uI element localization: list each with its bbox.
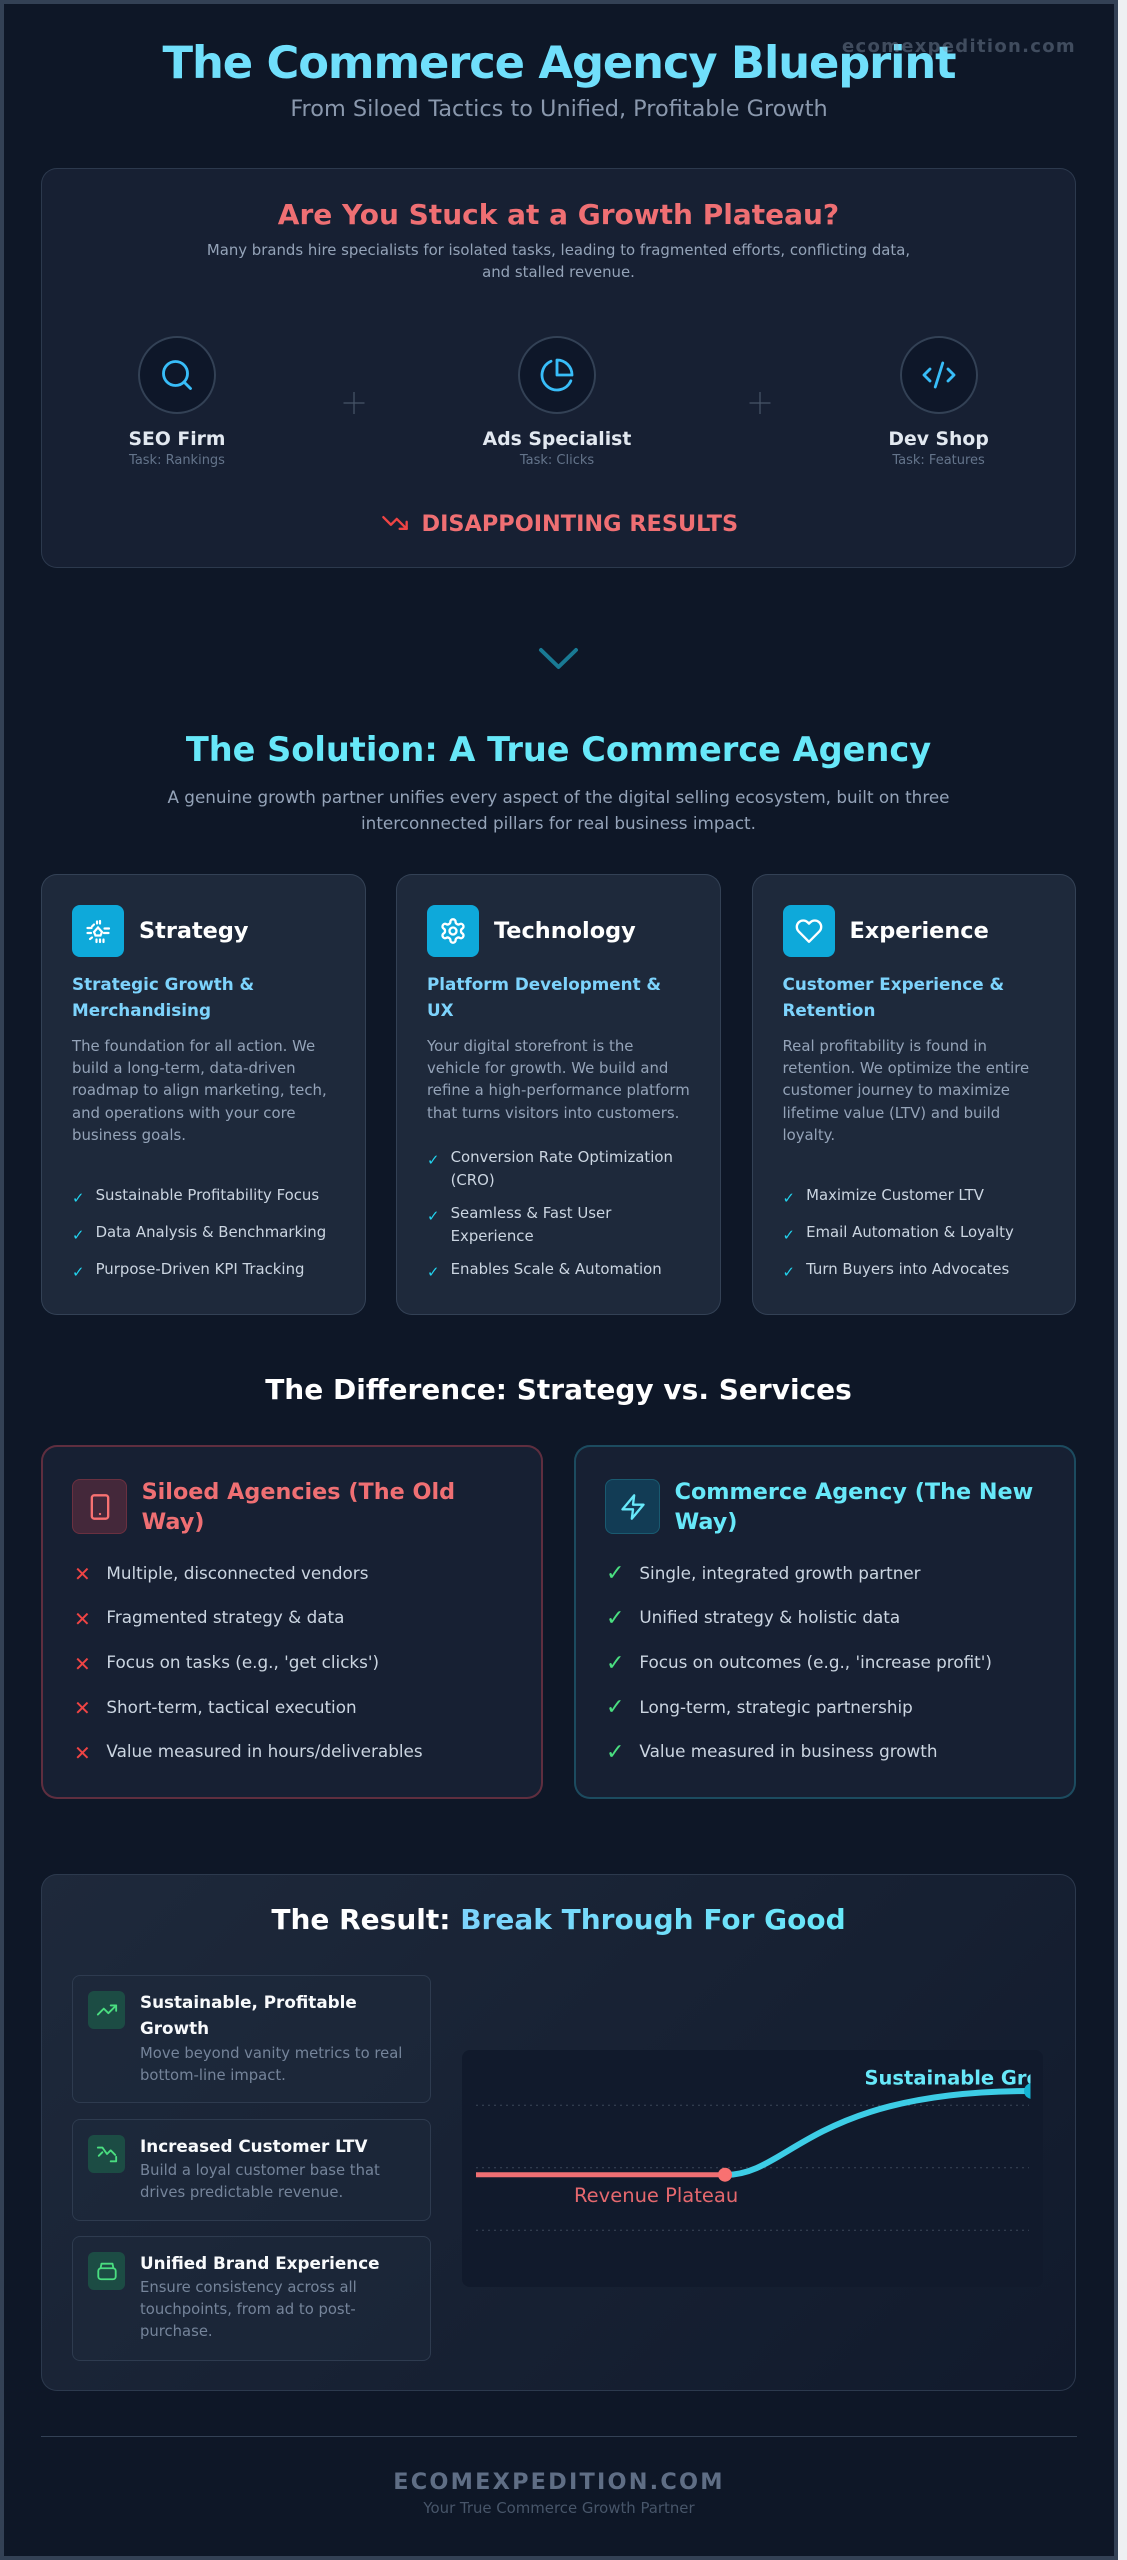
benefit title: Growth bbox=[140, 2018, 209, 2038]
panel: strategy: ✓ bbox=[72, 1263, 84, 1281]
card body bbox=[782, 1036, 1029, 1144]
label: dev shop: Dev Shop bbox=[888, 429, 989, 450]
panel: experience: Maximize Customer LTV bbox=[806, 1186, 984, 1204]
list item: ✓ bbox=[606, 1740, 624, 1765]
panel: technology: ✓ bbox=[427, 1151, 439, 1169]
card body: loyalty. bbox=[782, 1126, 835, 1144]
card body: The foundation for all action. We bbox=[72, 1036, 315, 1054]
footer bbox=[41, 2436, 1077, 2522]
card subtitle bbox=[782, 974, 1004, 1020]
list item: ✓ bbox=[606, 1650, 624, 1676]
benefit description: Move beyond vanity metrics to real bbox=[140, 2044, 402, 2062]
list item: Multiple, disconnected vendors bbox=[106, 1563, 368, 1583]
panel: strategy: ✓ bbox=[72, 1188, 84, 1206]
card body: vehicle for growth. We build and bbox=[427, 1059, 668, 1077]
icon: shuffle line bbox=[88, 2135, 125, 2173]
panel: strategy: Purpose-Driven KPI Tracking bbox=[96, 1260, 304, 1278]
list item: Focus on outcomes (e.g., 'increase profit') bbox=[639, 1652, 992, 1672]
heading: commerce: Commerce Agency (The New bbox=[675, 1479, 1033, 1505]
list item bbox=[782, 1260, 1009, 1281]
benefit title: Unified Brand Experience bbox=[140, 2253, 380, 2273]
card subtitle bbox=[72, 974, 254, 1020]
card body: Your digital storefront is the bbox=[427, 1036, 633, 1054]
icon: bolt bbox=[605, 1479, 660, 1534]
panel: experience: ✓ bbox=[782, 1188, 795, 1206]
list item: ✕ bbox=[74, 1652, 91, 1676]
list item: ✕ bbox=[74, 1562, 91, 1586]
heading: siloed bbox=[142, 1479, 455, 1535]
list item: ✓ bbox=[606, 1606, 624, 1631]
benefit title bbox=[140, 1992, 357, 2038]
panel: technology: Seamless & Fast User bbox=[451, 1204, 611, 1222]
icon: plus two bbox=[750, 392, 770, 414]
benefit title: Increased Customer LTV bbox=[140, 2136, 367, 2156]
benefit description: Build a loyal customer base that bbox=[140, 2162, 380, 2178]
list item bbox=[427, 1204, 612, 1245]
panel: experience: Email Automation & Loyalty bbox=[806, 1223, 1014, 1241]
heading: plateau: Are You Stuck at a Growth Plateau? bbox=[278, 198, 839, 230]
chart: revenue plateau to growth bbox=[462, 2050, 1030, 2231]
panel: experience bbox=[752, 874, 1076, 1315]
benefit description: purchase. bbox=[140, 2323, 213, 2340]
panel: technology: (CRO) bbox=[451, 1171, 495, 1189]
text: plateau description: Many brands hire specialists for isolated tasks, leading to fragmented efforts, conflicting data, bbox=[207, 241, 910, 259]
panel: technology: Enables Scale & Automation bbox=[451, 1260, 662, 1278]
list item bbox=[427, 1260, 662, 1281]
text: solution description bbox=[167, 786, 950, 832]
benefit description bbox=[140, 2277, 357, 2343]
panel: strategy bbox=[41, 874, 366, 1315]
card body: roadmap to align marketing, tech, bbox=[72, 1081, 327, 1099]
specialist: SEO firm bbox=[129, 336, 225, 468]
label: SEO firm: SEO Firm bbox=[129, 429, 225, 450]
heading: difference: The Difference: Strategy vs. Services bbox=[265, 1373, 852, 1406]
panel: technology: Experience bbox=[451, 1227, 534, 1245]
list item bbox=[782, 1186, 984, 1206]
benefit description: Ensure consistency across all bbox=[140, 2279, 357, 2296]
panel: strategy: Data Analysis & Benchmarking bbox=[96, 1223, 326, 1241]
heading: siloed: Way) bbox=[142, 1509, 204, 1535]
icon: smartphone bbox=[72, 1479, 127, 1534]
list item: ✕ bbox=[74, 1607, 91, 1631]
icon: search bbox=[138, 336, 216, 414]
icon: gear bbox=[427, 905, 479, 957]
card title: Experience bbox=[850, 918, 989, 944]
list item bbox=[72, 1260, 304, 1281]
label: dev task: Task: Features bbox=[892, 453, 985, 468]
card subtitle: Customer Experience & bbox=[782, 974, 1004, 994]
benefit: profitable growth bbox=[72, 1975, 431, 2103]
heading: siloed: Siloed Agencies (The Old bbox=[142, 1479, 455, 1505]
panel: technology: ✓ bbox=[427, 1207, 439, 1225]
chart: revenue plateau to growth: Revenue Plateau bbox=[574, 2184, 738, 2207]
panel: result bbox=[41, 1874, 1076, 2391]
list item: Single, integrated growth partner bbox=[639, 1563, 921, 1583]
arrow: chevron down bbox=[538, 648, 578, 670]
footer tagline: Your True Commerce Growth Partner bbox=[423, 2499, 695, 2517]
panel: siloed agencies bbox=[41, 1445, 543, 1799]
card body: lifetime value (LTV) and build bbox=[782, 1104, 1000, 1122]
text: disappointing results: DISAPPOINTING RESULTS bbox=[422, 511, 738, 537]
panel: experience: ✓ bbox=[782, 1263, 795, 1281]
card body: customer journey to maximize bbox=[782, 1081, 1010, 1099]
list item: ✕ bbox=[74, 1741, 91, 1765]
panel: technology: Conversion Rate Optimization bbox=[451, 1148, 673, 1166]
card body: business goals. bbox=[72, 1126, 186, 1144]
card body: Real profitability is found in bbox=[782, 1036, 987, 1054]
label: SEO task: Task: Rankings bbox=[129, 453, 225, 468]
specialist: ads bbox=[482, 336, 631, 468]
list item: Value measured in hours/deliverables bbox=[106, 1741, 423, 1761]
list item: Fragmented strategy & data bbox=[106, 1607, 344, 1627]
panel: technology bbox=[396, 874, 721, 1315]
subtitle: From Siloed Tactics to Unified, Profitable Growth bbox=[290, 96, 828, 122]
heading: commerce bbox=[675, 1479, 1033, 1535]
chart: revenue plateau to growth: Sustainable Growth bbox=[864, 2066, 1081, 2090]
panel: experience: Turn Buyers into Advocates bbox=[806, 1260, 1009, 1278]
card subtitle: UX bbox=[427, 1000, 454, 1020]
card title: Strategy bbox=[139, 918, 248, 944]
list item bbox=[72, 1223, 326, 1244]
card title: Technology bbox=[494, 918, 636, 944]
icon: plus one bbox=[344, 392, 364, 414]
list item bbox=[427, 1148, 673, 1189]
icon: code bbox=[900, 336, 978, 414]
label: ads task: Task: Clicks bbox=[520, 453, 594, 468]
list item: Short-term, tactical execution bbox=[106, 1697, 357, 1717]
card body bbox=[427, 1036, 690, 1122]
icon: heart bbox=[782, 905, 834, 957]
benefit: brand experience bbox=[72, 2236, 431, 2361]
card subtitle bbox=[427, 974, 661, 1020]
list item: ✕ bbox=[74, 1696, 91, 1720]
panel: strategy: ✓ bbox=[72, 1226, 84, 1244]
title: The Commerce Agency Blueprint bbox=[163, 36, 955, 88]
benefit description: bottom-line impact. bbox=[140, 2066, 286, 2084]
benefit title: Sustainable, Profitable bbox=[140, 1992, 357, 2012]
header bbox=[162, 36, 956, 122]
label: ads specialist: Ads Specialist bbox=[483, 429, 631, 450]
card subtitle: Retention bbox=[782, 1000, 875, 1020]
callout: disappointing results bbox=[382, 511, 738, 537]
panel: growth plateau bbox=[41, 168, 1076, 568]
benefit description: touchpoints, from ad to post- bbox=[140, 2301, 356, 2318]
list item: Value measured in business growth bbox=[639, 1741, 937, 1761]
panel: strategy: Sustainable Profitability Focus bbox=[96, 1186, 319, 1204]
text: plateau description bbox=[207, 241, 910, 281]
benefit description bbox=[140, 2042, 402, 2086]
list item: Focus on tasks (e.g., 'get clicks') bbox=[106, 1652, 379, 1672]
text: solution description: interconnected pillars for real business impact. bbox=[361, 812, 756, 832]
specialist: dev shop bbox=[888, 336, 989, 468]
benefit: customer LTV bbox=[72, 2119, 431, 2221]
card subtitle: Merchandising bbox=[72, 1000, 211, 1020]
icon: pie chart bbox=[518, 336, 596, 414]
heading: solution: The Solution: A True Commerce Agency bbox=[186, 730, 931, 769]
benefit description bbox=[140, 2160, 380, 2204]
list item bbox=[72, 1186, 319, 1206]
list item: ✓ bbox=[606, 1695, 624, 1720]
card subtitle: Platform Development & bbox=[427, 974, 661, 994]
card subtitle: Strategic Growth & bbox=[72, 974, 254, 994]
icon: package bbox=[88, 2252, 125, 2290]
icon: trending up bbox=[88, 1991, 125, 2029]
text: plateau description: and stalled revenue. bbox=[482, 263, 635, 281]
card body: build a long-term, data-driven bbox=[72, 1059, 296, 1077]
card body: and operations with your core bbox=[72, 1104, 296, 1122]
list item: ✓ bbox=[606, 1561, 624, 1586]
footer brand: ECOMEXPEDITION.COM bbox=[393, 2468, 725, 2494]
benefit description: drives predictable revenue. bbox=[140, 2184, 343, 2200]
card body: refine a high-performance platform bbox=[427, 1081, 690, 1099]
heading: result: The Result: Break Through For Good bbox=[271, 1903, 846, 1936]
panel: commerce agency bbox=[574, 1445, 1076, 1799]
card body bbox=[72, 1036, 327, 1144]
panel: experience: ✓ bbox=[782, 1226, 795, 1244]
card body: that turns visitors into customers. bbox=[427, 1104, 679, 1122]
panel: technology: ✓ bbox=[427, 1263, 439, 1281]
icon: trending down bbox=[382, 516, 408, 530]
icon: strategy bbox=[72, 905, 124, 957]
watermark: ecomexpedition.com bbox=[842, 36, 1076, 57]
list item bbox=[782, 1223, 1014, 1244]
card body: retention. We optimize the entire bbox=[782, 1059, 1029, 1077]
list item: Long-term, strategic partnership bbox=[639, 1697, 913, 1717]
heading: commerce: Way) bbox=[675, 1509, 737, 1535]
list item: Unified strategy & holistic data bbox=[639, 1607, 900, 1627]
text: solution description: A genuine growth partner unifies every aspect of the digital selling ecosystem, built on three bbox=[167, 786, 950, 806]
